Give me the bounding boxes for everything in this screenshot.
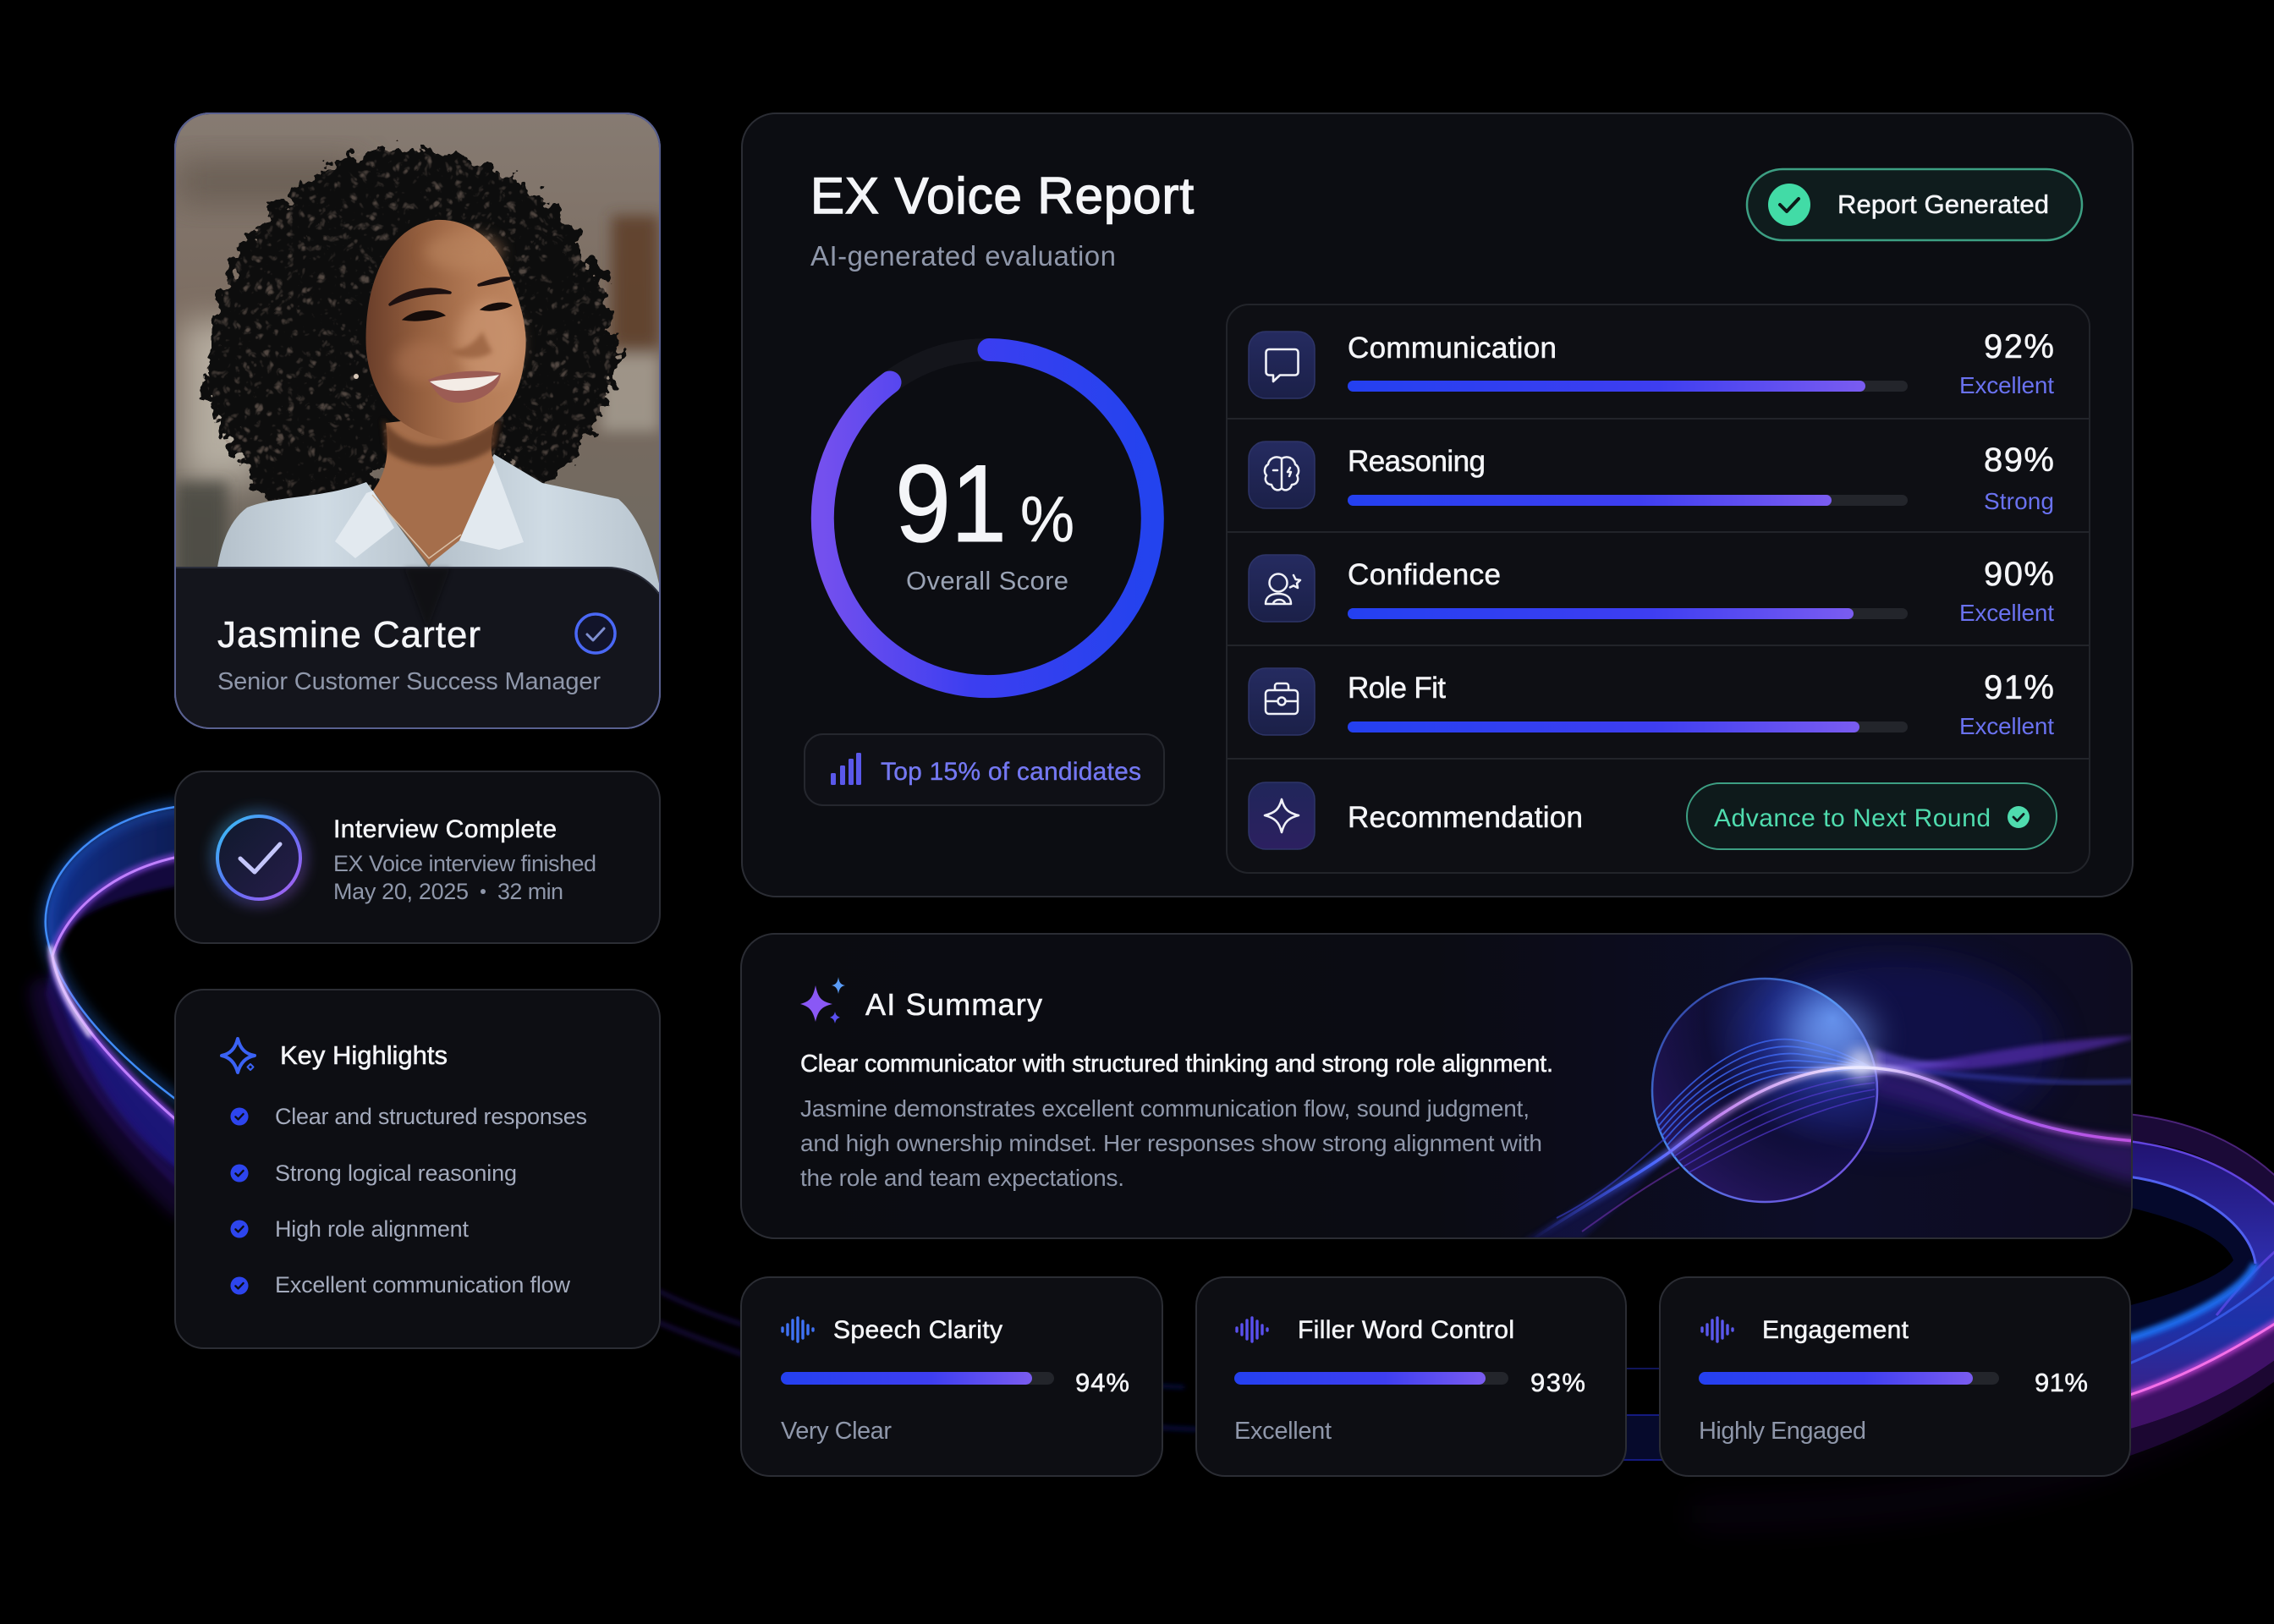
card: engagement bbox=[1660, 1277, 2130, 1476]
row: role fit: 91% bbox=[1984, 669, 2054, 706]
light ribbon: left loop bbox=[46, 806, 182, 1201]
purple strand fan below wave bbox=[1668, 1076, 1875, 1177]
row: communication: Excellent bbox=[1959, 372, 2054, 398]
highlight list: High role alignment bbox=[275, 1216, 469, 1242]
verified badge bbox=[576, 614, 615, 653]
status pill: report generated: Report Generated bbox=[1837, 189, 2049, 219]
lead sentence: Clear communicator with structured thinking and strong role alignment. bbox=[800, 1051, 1553, 1078]
job title: Senior Customer Success Manager bbox=[217, 668, 601, 695]
mouth bbox=[428, 371, 501, 403]
summary paragraph bbox=[800, 1095, 1542, 1191]
orb and wave illustration bbox=[1523, 956, 2140, 1240]
summary paragraph: Jasmine demonstrates excellent communication flow, sound judgment, bbox=[800, 1095, 1530, 1122]
subtitle: AI-generated evaluation bbox=[810, 240, 1116, 272]
interview text bbox=[333, 815, 596, 904]
row: role fit bbox=[1249, 668, 2054, 739]
card: engagement: 91% bbox=[2035, 1368, 2088, 1397]
summary paragraph: and high ownership mindset. Her responses show strong alignment with bbox=[800, 1130, 1542, 1156]
row: recommendation: Recommendation bbox=[1348, 801, 1583, 834]
panel: AI summary bbox=[741, 934, 2140, 1240]
card: speech clarity: Very Clear bbox=[781, 1418, 892, 1445]
status pill: report generated bbox=[1747, 169, 2082, 240]
highlight list: Strong logical reasoning bbox=[275, 1160, 517, 1186]
row: reasoning: 89% bbox=[1984, 442, 2054, 479]
row: reasoning bbox=[1249, 442, 2054, 514]
eyes bbox=[403, 303, 512, 321]
card: speech clarity: Speech Clarity bbox=[833, 1316, 1002, 1344]
icon: AI sparkles bbox=[800, 977, 845, 1023]
score ring: % bbox=[1020, 484, 1074, 556]
panel: interview complete bbox=[175, 771, 660, 943]
row: role fit: Excellent bbox=[1959, 713, 2054, 739]
icon: completed check bbox=[217, 815, 301, 900]
card: filler word control: 93% bbox=[1530, 1368, 1585, 1397]
blue strand fan above wave bbox=[1654, 1040, 1871, 1149]
brows bbox=[390, 278, 509, 304]
interview text: 32 min bbox=[497, 879, 563, 904]
highlight list: Clear and structured responses bbox=[275, 1104, 587, 1129]
recommendation pill bbox=[1687, 783, 2057, 849]
ear stud bbox=[354, 374, 359, 379]
panel: key highlights bbox=[175, 990, 660, 1348]
portrait photo bbox=[176, 114, 659, 592]
row: confidence: Confidence bbox=[1348, 558, 1501, 591]
face bbox=[365, 220, 526, 440]
shirt bbox=[217, 482, 429, 568]
name: Jasmine Carter bbox=[217, 614, 481, 656]
light ribbon: right loop bbox=[2128, 1114, 2274, 1457]
card: filler word control: Filler Word Control bbox=[1298, 1316, 1514, 1344]
card: engagement: Highly Engaged bbox=[1699, 1418, 1866, 1445]
percentile pill bbox=[805, 734, 1164, 805]
title: EX Voice Report bbox=[810, 167, 1194, 224]
neck and chest bbox=[373, 421, 495, 565]
row: confidence bbox=[1249, 555, 2054, 626]
row: communication: Communication bbox=[1348, 332, 1557, 365]
collar bbox=[335, 463, 524, 558]
light ribbon: lower sweep bbox=[651, 1287, 2274, 1514]
summary paragraph: the role and team expectations. bbox=[800, 1165, 1124, 1191]
row: confidence: 90% bbox=[1984, 556, 2054, 593]
metric table bbox=[1227, 304, 2090, 873]
highlight list bbox=[230, 1104, 587, 1298]
interview text: May 20, 2025 bbox=[333, 879, 469, 904]
hair bbox=[206, 148, 617, 529]
interview text: EX Voice interview finished bbox=[333, 851, 596, 876]
score label: Overall Score bbox=[906, 566, 1068, 595]
row: recommendation bbox=[1249, 782, 2057, 849]
heading: AI Summary bbox=[865, 987, 1042, 1022]
row: communication: 92% bbox=[1984, 328, 2054, 365]
panel: EX Voice report bbox=[742, 113, 2133, 897]
panel: candidate profile bbox=[175, 113, 660, 728]
row: communication bbox=[1249, 328, 2054, 398]
highlight list: Excellent communication flow bbox=[275, 1272, 570, 1298]
row: confidence: Excellent bbox=[1959, 600, 2054, 626]
card: filler word control bbox=[1196, 1277, 1626, 1476]
card: speech clarity bbox=[741, 1277, 1162, 1476]
nose bbox=[450, 332, 492, 358]
heading: Key Highlights bbox=[280, 1040, 448, 1070]
percentile pill: Top 15% of candidates bbox=[881, 758, 1141, 786]
interview text: Interview Complete bbox=[333, 815, 557, 843]
score ring bbox=[822, 350, 1152, 687]
row: reasoning: Reasoning bbox=[1348, 445, 1486, 478]
name panel bbox=[176, 568, 659, 727]
icon: sparkle bbox=[222, 1039, 255, 1073]
row: role fit: Role Fit bbox=[1348, 672, 1446, 705]
recommendation pill: Advance to Next Round bbox=[1714, 804, 1991, 832]
card: filler word control: Excellent bbox=[1234, 1418, 1332, 1445]
card: speech clarity: 94% bbox=[1075, 1368, 1129, 1397]
score value: 91 bbox=[895, 442, 1007, 565]
card: engagement: Engagement bbox=[1762, 1316, 1909, 1344]
row: reasoning: Strong bbox=[1984, 488, 2054, 514]
